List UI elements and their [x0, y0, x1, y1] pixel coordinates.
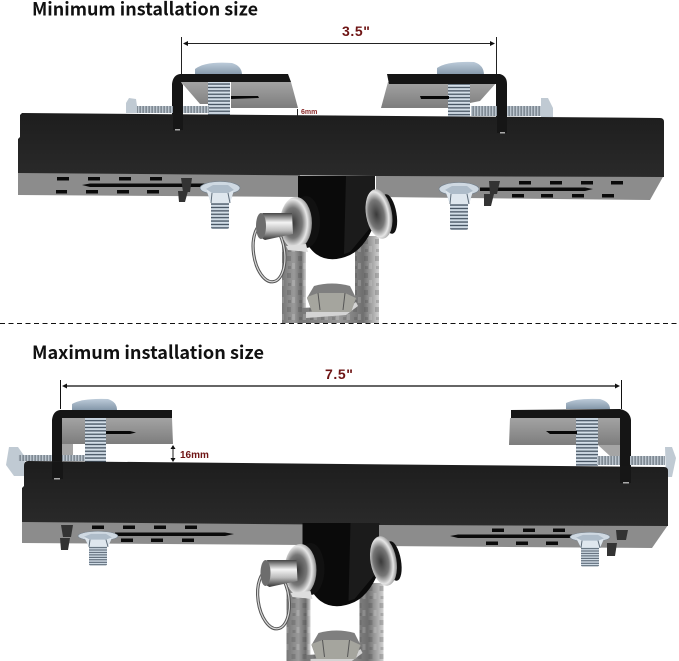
left clamp bolt — [72, 399, 117, 462]
label: 3.5 inch: 3.5" — [342, 23, 370, 39]
beam underside — [22, 521, 668, 548]
label: 7.5 inch: 7.5" — [325, 366, 354, 382]
beam — [22, 461, 668, 526]
dimension arrow: 3.5 inch — [182, 23, 496, 74]
right flange nut — [439, 182, 479, 230]
clamp legs over beam — [52, 462, 631, 484]
gap label: 6mm: 6mm — [301, 109, 317, 116]
left clamp plate — [52, 410, 173, 479]
dashed divider — [0, 322, 679, 324]
bottom shackle and quick-release pin — [254, 523, 404, 661]
top shackle and quick-release pin — [249, 176, 400, 330]
underside slots, left — [56, 177, 205, 202]
underside slots, left — [60, 525, 234, 550]
underside slots, right — [450, 528, 628, 556]
left clamp plate — [172, 74, 298, 130]
left horizontal bolt — [6, 447, 85, 476]
top assembly: mounting clamps and beam — [18, 62, 664, 230]
beam — [18, 113, 664, 177]
left flange nut — [200, 182, 240, 229]
bottom assembly: mounting clamps and beam — [6, 399, 676, 567]
left flange nut — [78, 531, 118, 566]
right clamp plate — [381, 74, 507, 133]
beam underside — [18, 172, 664, 200]
right clamp plate — [509, 409, 631, 483]
left horizontal bolt — [126, 98, 209, 113]
gap label: 16mm: 16mm — [180, 450, 209, 461]
right clamp bolt — [566, 399, 610, 466]
right clamp bolt — [437, 62, 484, 117]
heading: maximum installation size: Maximum installation size — [32, 339, 264, 365]
dimension arrow: 7.5 inch — [60, 366, 622, 409]
right horizontal bolt — [471, 98, 553, 117]
right horizontal bolt — [597, 447, 676, 477]
gap label: 16mm — [170, 445, 209, 462]
clamp legs over beam — [173, 113, 507, 134]
underside slots, right — [480, 181, 623, 206]
left clamp bolt — [195, 63, 242, 116]
right flange nut — [570, 532, 610, 567]
